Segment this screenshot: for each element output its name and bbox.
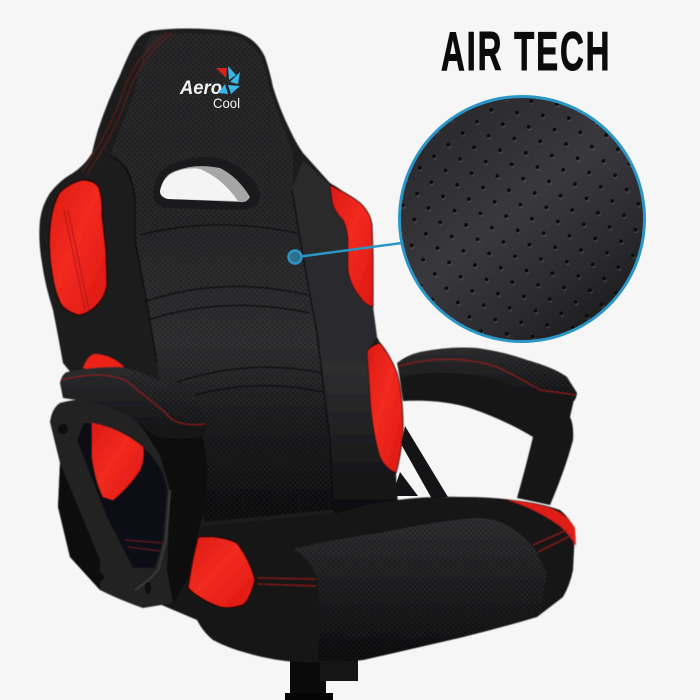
frame front column [137, 420, 208, 603]
logo wordmark: Cool [213, 95, 240, 111]
seat front panel [293, 518, 547, 661]
connector line [297, 243, 402, 257]
logo wordmark: Aero [179, 78, 222, 99]
gas lift post [285, 655, 358, 700]
arm frame [398, 362, 575, 505]
frame rim highlight [135, 490, 170, 590]
chair back [39, 28, 403, 560]
arm pad [397, 348, 577, 403]
seat right red panel [507, 500, 576, 546]
center texture panel [135, 222, 333, 522]
red panel: right lower [367, 343, 403, 473]
seat left red panel [188, 537, 255, 608]
red panel seen through frame [92, 423, 144, 500]
red panel: left upper [49, 180, 107, 315]
right armrest [397, 348, 577, 505]
title: AIR TECH [441, 20, 611, 82]
arm frame [50, 399, 208, 608]
pad carbon [480, 350, 577, 393]
back shell [39, 28, 403, 560]
pad stitching [399, 359, 576, 395]
left armrest [50, 367, 208, 608]
seat stitching [258, 530, 572, 586]
logo: AeroCool [179, 66, 240, 111]
connector dot [288, 250, 302, 264]
frame screws [58, 424, 151, 594]
arm pad [60, 367, 208, 438]
logo emblem [216, 66, 240, 94]
red panel: left small [83, 354, 124, 372]
seat base [150, 497, 575, 663]
seat [150, 497, 576, 663]
logo wordmark [179, 78, 240, 111]
panel seams [110, 155, 333, 510]
right armrest struts [392, 426, 448, 499]
carbon texture [110, 33, 333, 522]
pad carbon [123, 367, 208, 425]
seat texture [293, 518, 547, 661]
red stitching top [82, 32, 172, 174]
headrest and center panel base [110, 33, 333, 522]
right bolster [292, 160, 398, 516]
opening backdrop [77, 423, 167, 568]
back plate [58, 463, 100, 590]
headrest cut-out [153, 157, 260, 210]
chair [39, 28, 577, 663]
magnified leather circle [400, 96, 644, 342]
pad stitching [62, 375, 205, 425]
inner seat stitching [125, 540, 162, 551]
red panel: right upper [330, 185, 373, 307]
